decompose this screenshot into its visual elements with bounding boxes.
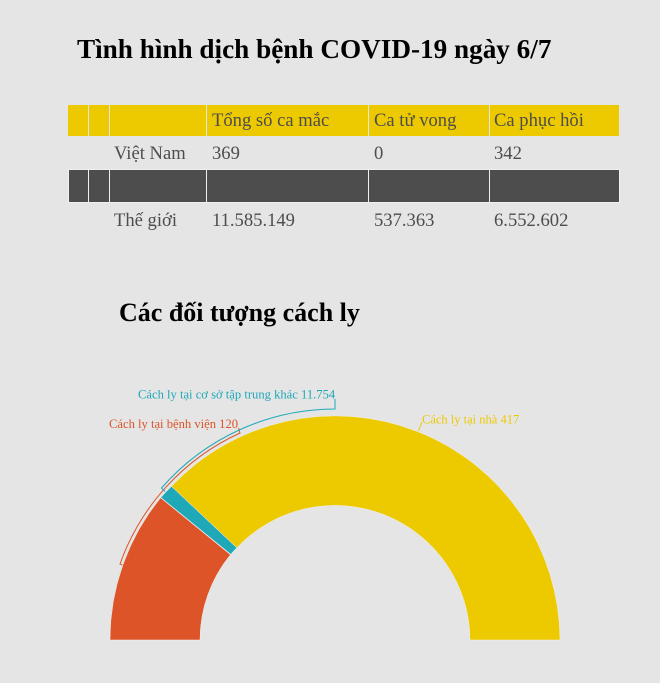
callout: hospital <box>109 417 240 565</box>
segment: home <box>172 416 560 640</box>
table header row <box>68 105 619 136</box>
row: Thế giới: Thế giới <box>114 210 177 231</box>
row: Thế giới: 537.363 <box>374 210 434 231</box>
dark separator row <box>68 169 620 203</box>
semi-donut chart <box>109 388 560 640</box>
table header row: Tổng số ca mắc <box>212 110 329 131</box>
row: Việt Nam <box>114 143 522 164</box>
callout: other centralized facilities: Cách ly tại cơ sở tập trung khác 11.754 <box>138 388 336 402</box>
row: Thế giới: 6.552.602 <box>494 210 568 231</box>
row: Thế giới: 11.585.149 <box>212 210 295 231</box>
row: Việt Nam: 0 <box>374 143 383 164</box>
row: Thế giới <box>114 210 568 231</box>
segment: hospital <box>110 498 230 640</box>
row: Việt Nam: 369 <box>212 143 240 164</box>
callout: other centralized facilities <box>138 388 336 492</box>
data table <box>68 105 620 231</box>
table header row: Ca phục hồi <box>494 110 584 131</box>
chart heading: Các đối tượng cách ly <box>119 298 360 327</box>
callout: home: Cách ly tại nhà 417 <box>422 412 519 426</box>
table header row: Ca tử vong <box>374 110 456 131</box>
row: Việt Nam: Việt Nam <box>114 143 186 164</box>
callout: hospital: Cách ly tại bệnh viện 120 <box>109 417 238 431</box>
title: Tình hình dịch bệnh COVID-19 ngày 6/7 <box>77 34 551 64</box>
row: Việt Nam: 342 <box>494 143 522 164</box>
segment: other centralized facilities <box>161 486 237 554</box>
